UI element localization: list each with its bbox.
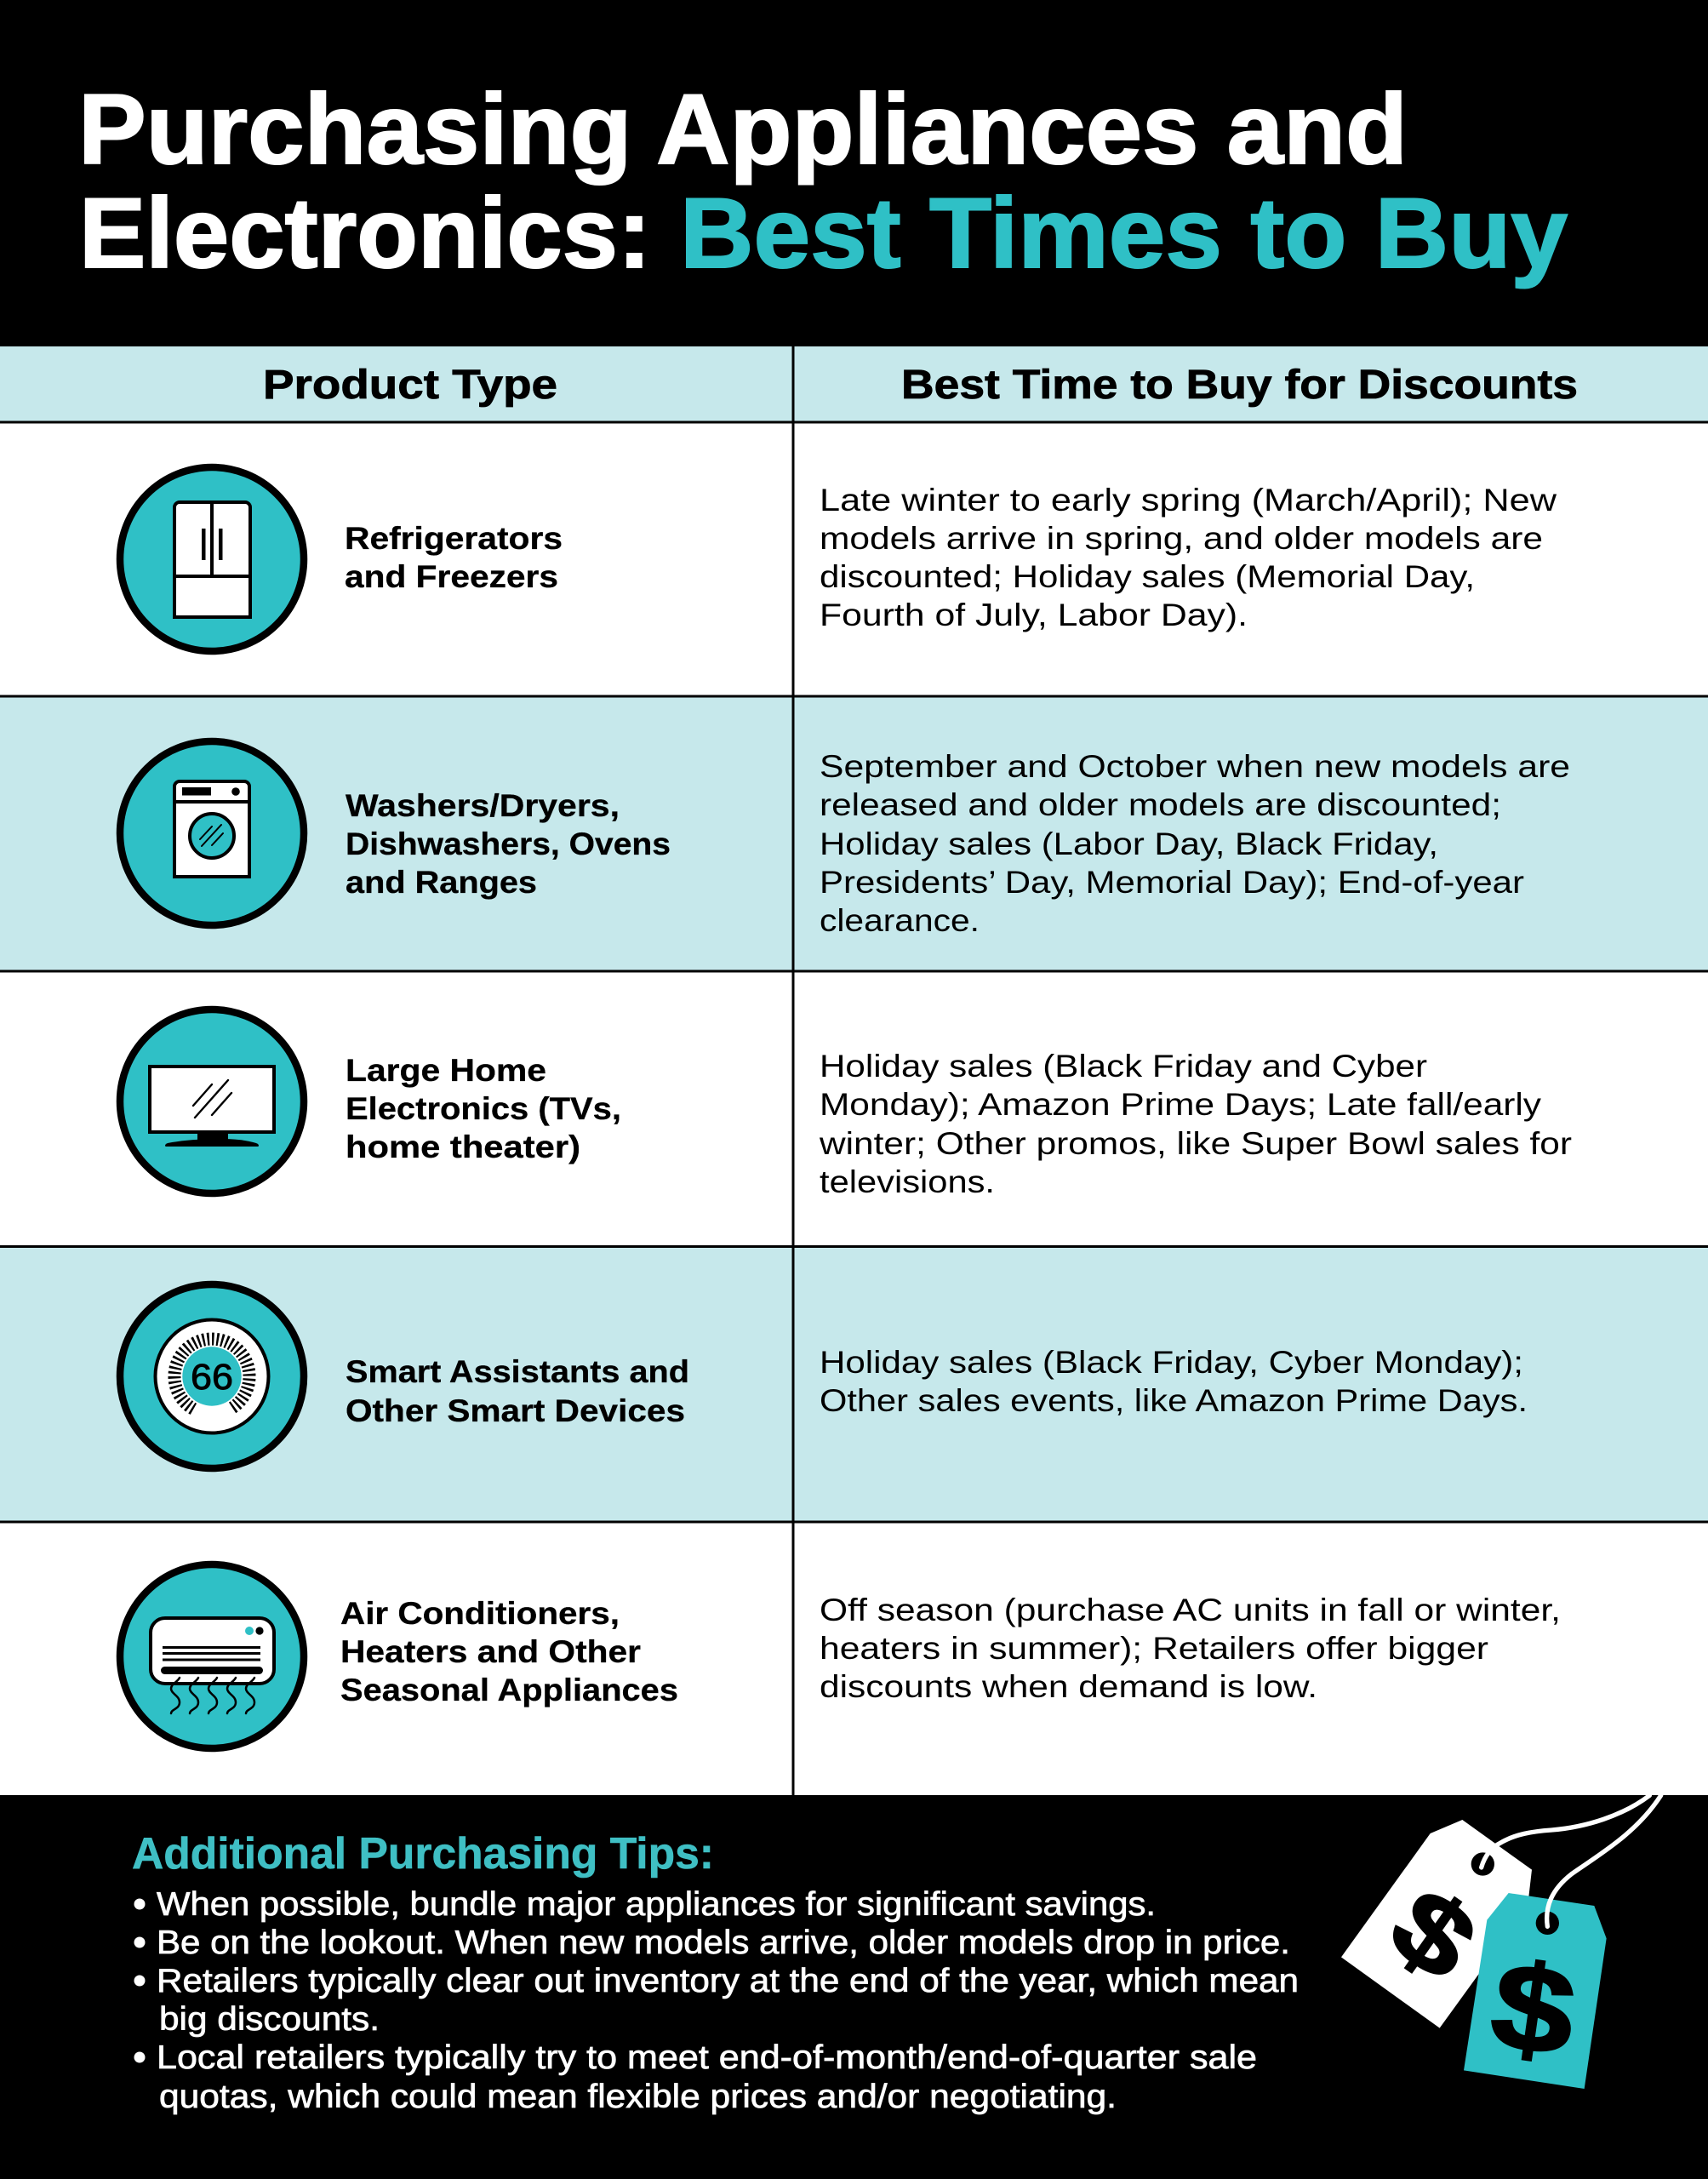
product label: [346, 787, 671, 900]
product label: Smart Assistants and: [346, 1353, 689, 1389]
best time text: [820, 1592, 1561, 1704]
icon: air conditioner: [120, 1564, 304, 1748]
tips list: quotas, which could mean flexible prices and/or negotiating.: [159, 2079, 1117, 2115]
product label: Large Home: [346, 1052, 546, 1088]
best time text: televisions.: [820, 1164, 995, 1199]
best time text: September and October when new models are: [820, 748, 1570, 784]
table header row: [0, 346, 1708, 421]
product label: and Freezers: [345, 558, 558, 594]
best time text: [820, 1344, 1528, 1418]
tips list: Be on the lookout. When new models arrive, older models drop in price.: [157, 1924, 1290, 1961]
best time text: Holiday sales (Labor Day, Black Friday,: [820, 826, 1438, 861]
product label: [340, 1595, 678, 1707]
product label: Heaters and Other: [340, 1633, 641, 1669]
title: Electronics:: [79, 177, 651, 289]
icon: price tags: $: [1483, 1936, 1583, 2082]
panel: additional purchasing tips: [0, 1795, 1708, 2179]
icon: price tags: $: [1370, 1865, 1497, 2003]
row: large home electronics: [0, 971, 1708, 1246]
tips list: Retailers typically clear out inventory at the end of the year, which mean: [157, 1963, 1299, 1999]
tips list: [134, 1886, 1299, 2115]
product label: and Ranges: [346, 864, 537, 900]
column heading: best time to buy: Best Time to Buy for Discounts: [901, 363, 1578, 408]
best time text: Late winter to early spring (March/April); New: [820, 482, 1557, 518]
tips heading: Additional Purchasing Tips:: [132, 1829, 714, 1879]
title: [78, 73, 1568, 289]
best time text: models arrive in spring, and older models are: [820, 520, 1543, 556]
product label: Washers/Dryers,: [346, 787, 620, 823]
product label: Air Conditioners,: [340, 1595, 620, 1631]
title banner: [0, 0, 1708, 346]
best time text: Off season (purchase AC units in fall or winter,: [820, 1592, 1561, 1627]
product label: Dishwashers, Ovens: [346, 826, 671, 861]
icon: television: [120, 1009, 304, 1193]
best time text: [820, 482, 1557, 632]
best time text: discounts when demand is low.: [820, 1668, 1317, 1704]
icon: washing machine: [120, 741, 304, 925]
best time text: Holiday sales (Black Friday and Cyber: [820, 1048, 1427, 1084]
product label: [345, 520, 563, 594]
row: washers, dryers, dishwashers, ovens: [0, 697, 1708, 970]
row: refrigerators and freezers: [0, 423, 1708, 696]
row: smart assistants and devices: [0, 1247, 1708, 1521]
icon: price tags: [1341, 1795, 1661, 2089]
tips list: big discounts.: [159, 2001, 380, 2038]
icon: smart thermostat: 66: [191, 1357, 233, 1398]
best time text: released and older models are discounted;: [820, 786, 1501, 822]
best time text: heaters in summer); Retailers offer bigger: [820, 1630, 1488, 1666]
best time text: Holiday sales (Black Friday, Cyber Monday);: [820, 1344, 1523, 1380]
product label: Refrigerators: [345, 520, 563, 556]
product label: home theater): [346, 1129, 580, 1164]
column heading: product type: Product Type: [263, 363, 557, 408]
icon: smart thermostat: [120, 1284, 304, 1468]
row: air conditioners and heaters: [0, 1522, 1708, 1796]
best time text: Presidents’ Day, Memorial Day); End-of-year: [820, 864, 1524, 900]
best time text: clearance.: [820, 902, 980, 938]
best time text: Other sales events, like Amazon Prime Days.: [820, 1382, 1528, 1418]
product label: [346, 1353, 689, 1428]
best time text: [820, 748, 1570, 938]
tips list: Local retailers typically try to meet end-of-month/end-of-quarter sale: [157, 2039, 1257, 2076]
best time text: winter; Other promos, like Super Bowl sales for: [819, 1125, 1572, 1161]
product label: Electronics (TVs,: [346, 1090, 621, 1126]
title: Purchasing Appliances and: [78, 73, 1408, 185]
tips list: When possible, bundle major appliances for significant savings.: [157, 1886, 1156, 1923]
product label: [346, 1052, 621, 1164]
best time text: discounted; Holiday sales (Memorial Day,: [820, 558, 1475, 594]
product label: Other Smart Devices: [346, 1393, 685, 1428]
icon: refrigerator: [120, 467, 304, 651]
title: Best Times to Buy: [680, 177, 1568, 289]
best time text: [819, 1048, 1572, 1199]
best time text: Fourth of July, Labor Day).: [820, 597, 1248, 632]
best time text: Monday); Amazon Prime Days; Late fall/early: [820, 1086, 1541, 1122]
product label: Seasonal Appliances: [340, 1672, 678, 1707]
